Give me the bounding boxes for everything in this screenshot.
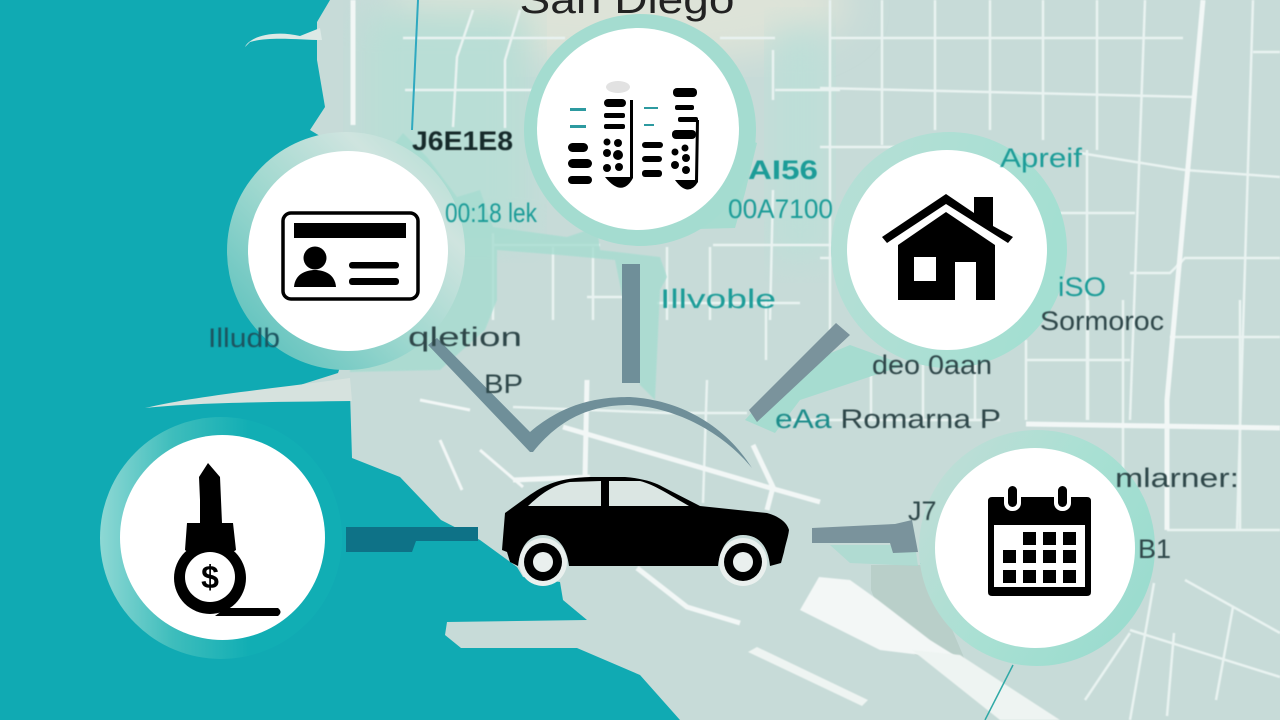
icon: ID card	[283, 213, 418, 299]
node: calendar	[919, 430, 1155, 666]
major roads	[353, 0, 1280, 623]
icon: key: $	[201, 559, 219, 595]
dark scattered labels	[208, 126, 1239, 564]
dark scattered labels: qletion	[408, 322, 522, 352]
teal scattered labels: Illvoble	[660, 284, 776, 314]
icon: calendar	[988, 486, 1091, 596]
node: building	[524, 14, 756, 246]
dark scattered labels: BP	[484, 369, 523, 399]
dark scattered labels: J6E1E8	[412, 126, 513, 156]
teal scattered labels: Apreif	[1000, 143, 1083, 173]
teal scattered labels: 00:18 lek	[445, 198, 537, 228]
node: home	[831, 132, 1067, 368]
icon: car	[502, 477, 789, 586]
icon: house	[882, 194, 1013, 300]
teal scattered labels: AI56	[748, 155, 818, 185]
ocean sliver	[145, 378, 352, 408]
top sliver	[245, 28, 322, 47]
icon: buildings	[568, 88, 699, 190]
dark scattered labels: Sormoroc	[1040, 306, 1164, 336]
building disc	[537, 28, 739, 230]
ocean	[0, 0, 680, 720]
teal scattered labels: 00A7100	[728, 194, 833, 224]
dark scattered labels: eAa Romarna P	[775, 404, 1001, 434]
node: ID card	[227, 132, 465, 370]
map street grid	[403, 0, 1280, 720]
dark scattered labels: B1	[1138, 534, 1171, 564]
connector lines	[346, 0, 1013, 720]
dark scattered labels: mlarner:	[1115, 463, 1239, 493]
teal map blobs	[350, 120, 918, 566]
dark scattered labels: J7	[908, 496, 937, 526]
dark scattered labels: deo 0aan	[872, 350, 992, 380]
dark scattered labels: Illudb	[208, 323, 280, 353]
node: key with dollar	[100, 417, 342, 659]
teal scattered labels: iSO	[1058, 272, 1106, 302]
teal scattered labels	[445, 143, 1106, 314]
icon: key	[174, 463, 280, 616]
